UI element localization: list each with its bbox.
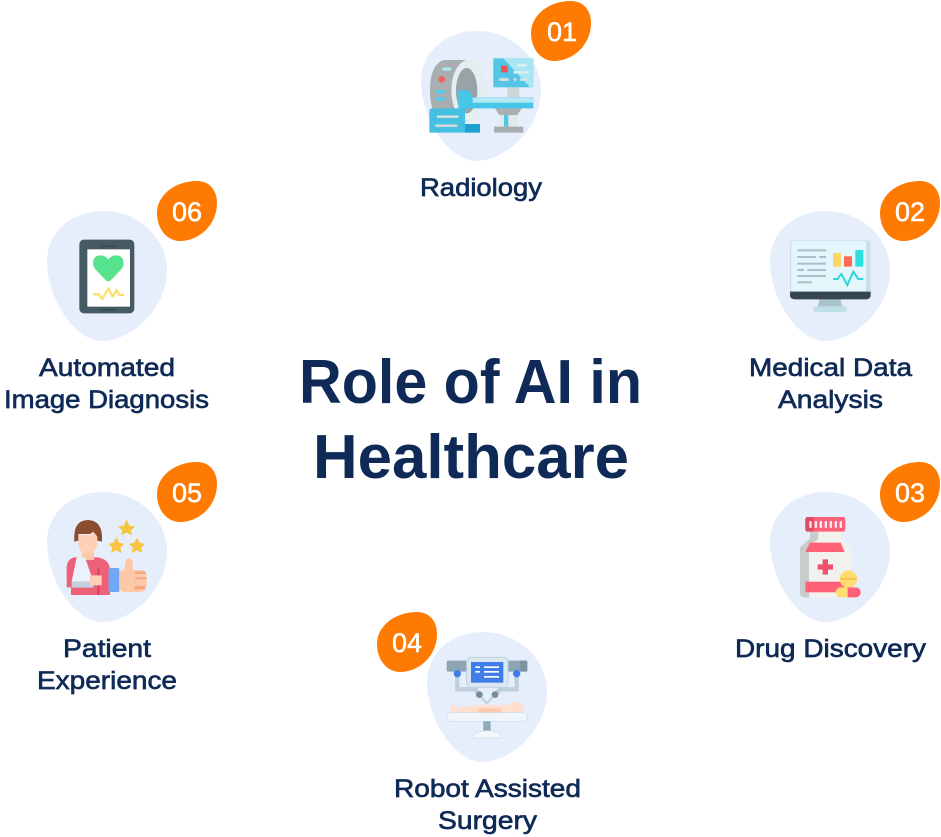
number badge 04: 04 (392, 628, 422, 658)
background blob 02 (770, 211, 890, 341)
number badge 02: 02 (895, 197, 925, 227)
label: Robot Assisted Surgery (394, 775, 581, 835)
number badge 05 (157, 462, 217, 522)
label: Automated Image Diagnosis: Image Diagnosis (4, 386, 209, 414)
panel: 05 Patient Experience (37, 462, 217, 695)
title: Healthcare (313, 423, 629, 492)
label: Drug Discovery: Drug Discovery (735, 635, 927, 663)
number badge 01 (531, 1, 591, 61)
label: Radiology: Radiology (420, 174, 543, 202)
number badge 03: 03 (895, 478, 925, 508)
panel: 03 Drug Discovery (735, 462, 940, 663)
label: Automated Image Diagnosis: Automated (39, 354, 175, 382)
title (299, 348, 642, 492)
number badge 05: 05 (172, 478, 202, 508)
label: Medical Data Analysis: Analysis (778, 386, 883, 414)
background blob 06 (47, 211, 167, 341)
background blob 04 (427, 632, 547, 762)
icon: MRI scanner (429, 58, 533, 133)
background blob 03 (770, 492, 890, 622)
label: Patient Experience (37, 635, 177, 695)
number badge 03 (880, 462, 940, 522)
number badge 01: 01 (547, 17, 577, 47)
background blob 01 (421, 31, 541, 161)
label: Automated Image Diagnosis (4, 354, 209, 414)
panel: 02 Medical Data Analysis (749, 181, 940, 414)
icon: medicine bottle (800, 517, 861, 597)
number badge 04 (377, 612, 437, 672)
icon: patient with thumbs up (67, 519, 147, 595)
number badge 02 (880, 181, 940, 241)
number badge 06: 06 (172, 197, 202, 227)
label: Medical Data Analysis (749, 354, 912, 414)
label: Robot Assisted Surgery: Robot Assisted (394, 775, 581, 803)
label: Patient Experience: Patient (63, 635, 151, 663)
label: Robot Assisted Surgery: Surgery (438, 807, 538, 835)
panel: 04 Robot Assisted Surgery (377, 612, 581, 835)
number badge 06 (157, 181, 217, 241)
label: Medical Data Analysis: Medical Data (749, 354, 912, 382)
icon: surgical robot (447, 657, 528, 738)
icon: data monitor (790, 240, 871, 312)
panel: 01 Radiology (420, 1, 591, 202)
background blob 05 (47, 492, 167, 622)
title: Role of AI in (299, 348, 642, 417)
panel: 06 Automated Image Diagnosis (4, 181, 217, 414)
label: Patient Experience: Experience (37, 667, 177, 695)
icon: tablet with heart (79, 240, 134, 313)
